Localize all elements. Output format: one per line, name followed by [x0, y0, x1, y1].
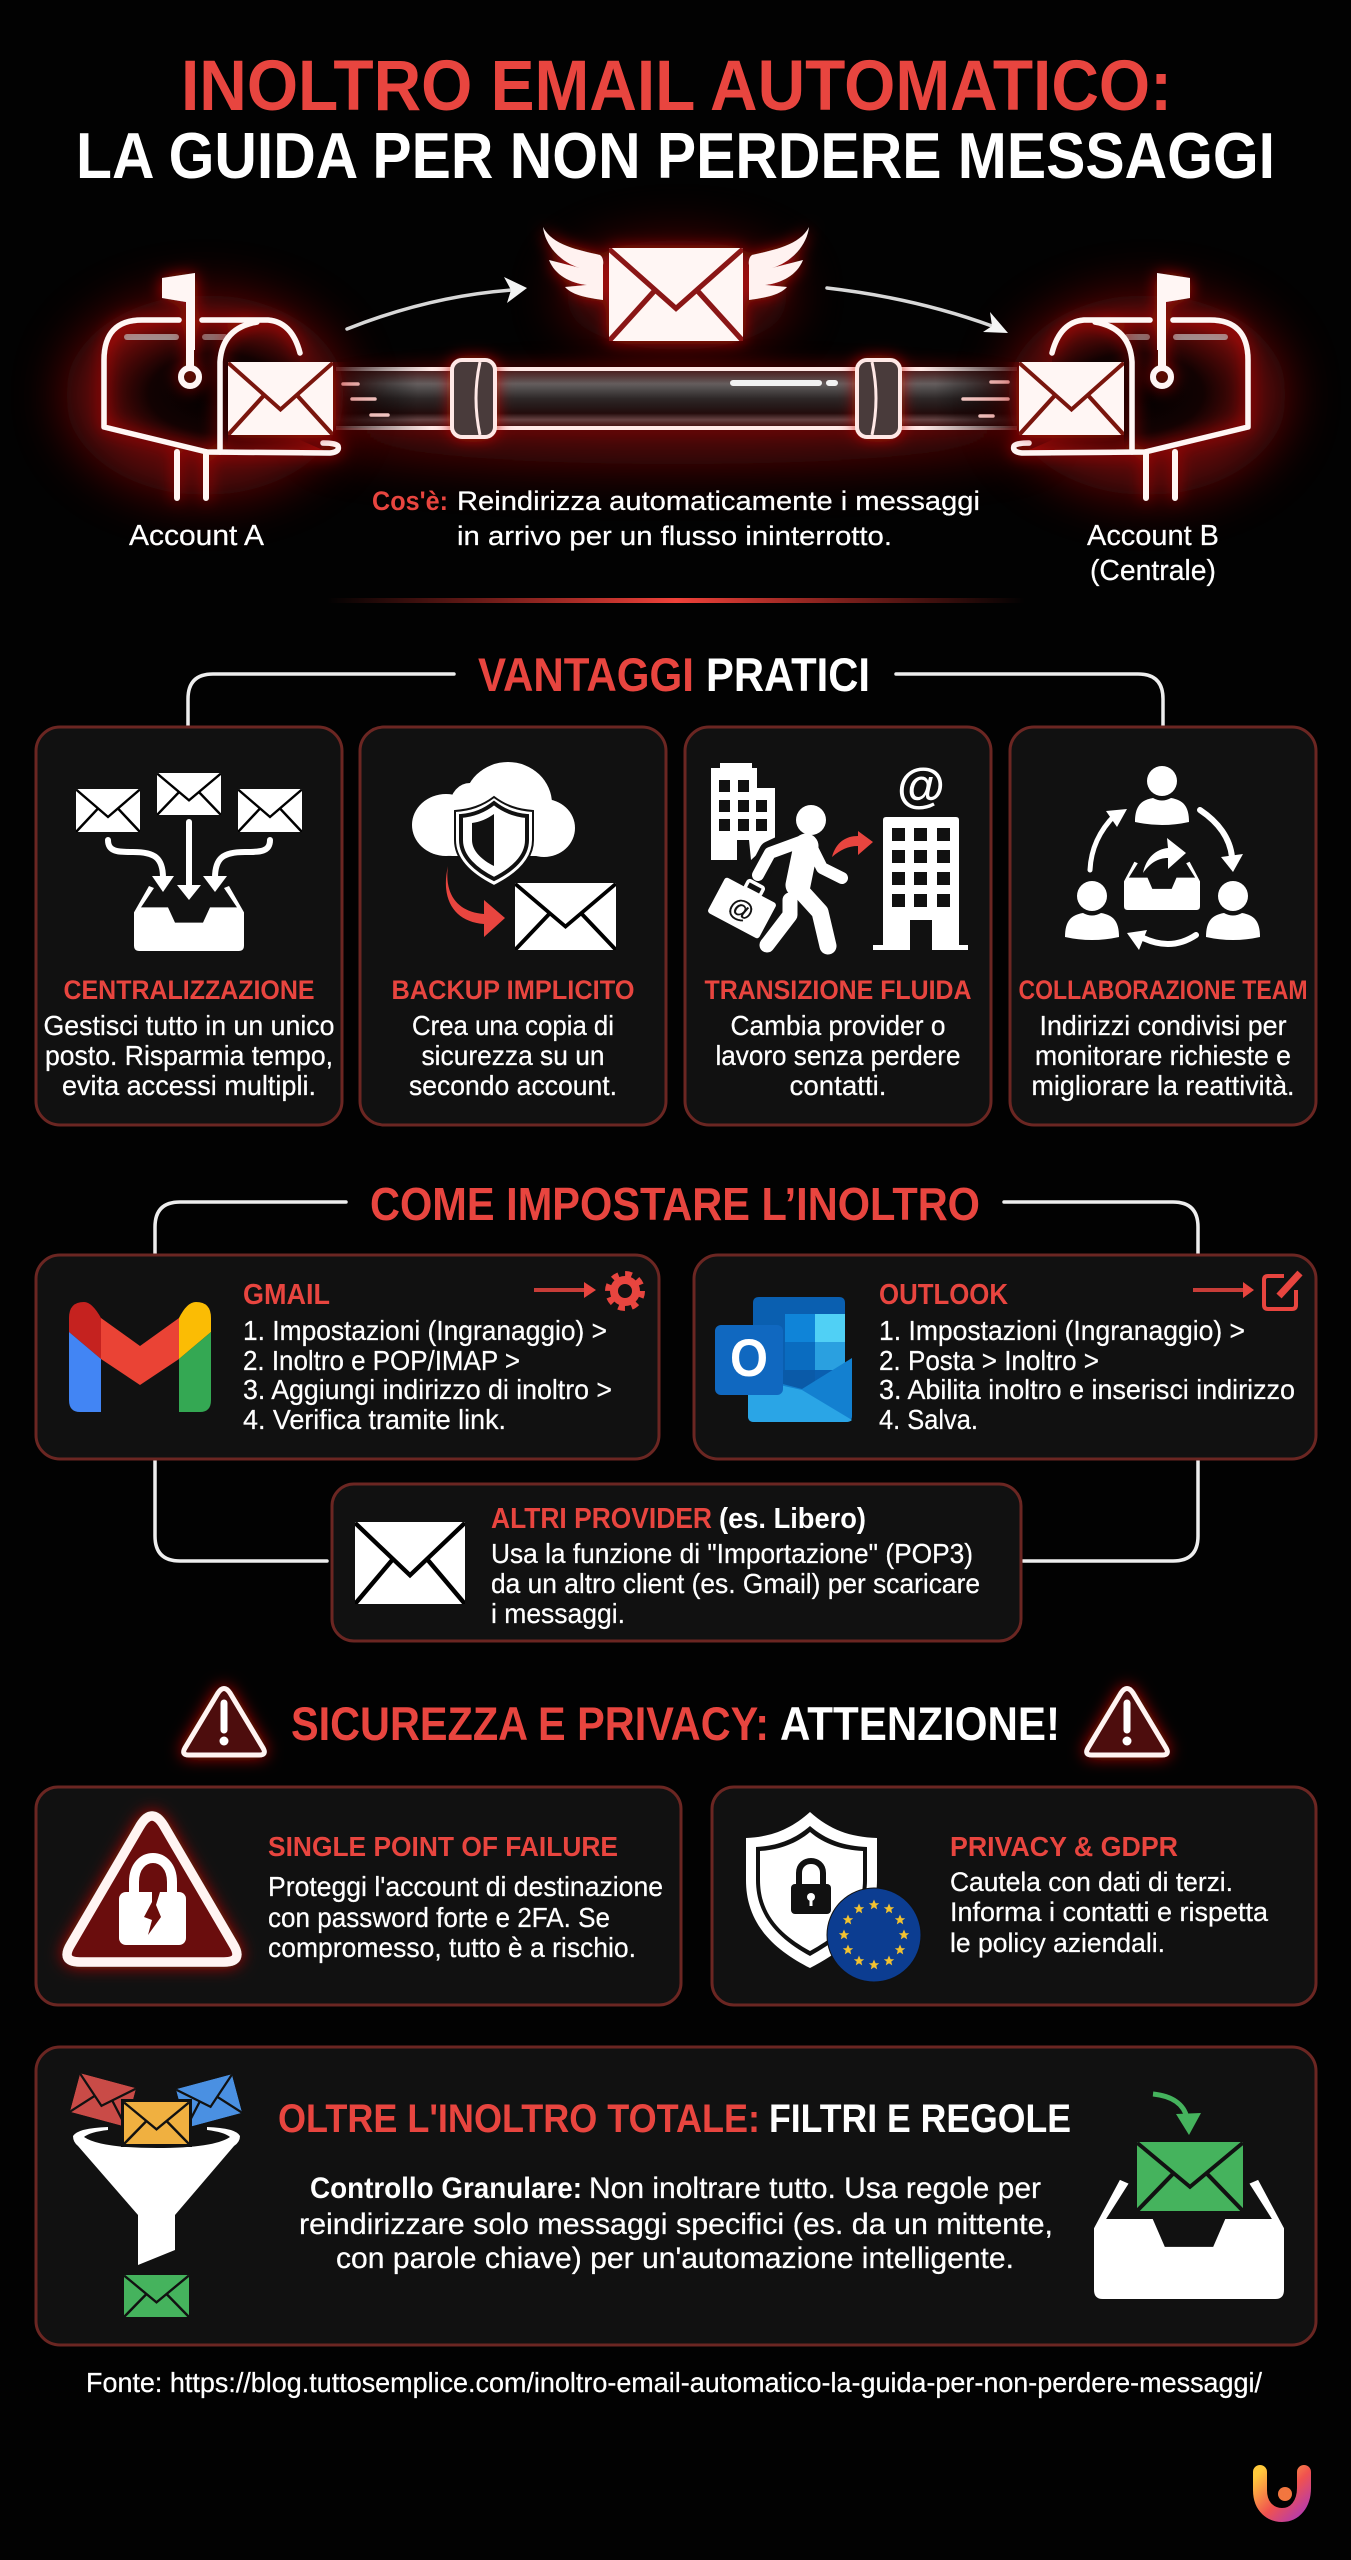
steps: 4. Verifica tramite link.: [243, 1404, 506, 1435]
icon: email funnel: [70, 2073, 242, 2317]
text: [299, 2172, 1053, 2275]
label: Account B: [1087, 520, 1219, 587]
heading: sicurezza e privacy: [184, 1688, 1167, 1755]
steps: 3. Aggiungi indirizzo di inoltro >: [243, 1374, 612, 1405]
icon: broken lock warning: [67, 1816, 237, 1962]
arrow: to mailbox: [827, 288, 1008, 333]
text: compromesso, tutto è a rischio.: [268, 1932, 636, 1963]
title: PRIVACY & GDPR: [950, 1831, 1178, 1862]
text: Non inoltrare tutto. Usa regole per: [589, 2172, 1041, 2205]
text: con parole chiave) per un'automazione intelligente.: [336, 2242, 1014, 2275]
icon: warning right: [1087, 1688, 1167, 1755]
text: Crea una copia di: [412, 1010, 614, 1041]
text: Informa i contatti e rispetta: [950, 1897, 1269, 1927]
definition text: [372, 486, 980, 551]
icon: person moving between offices: [707, 760, 968, 950]
heading: sicurezza e privacy: SICUREZZA E PRIVACY:: [291, 1697, 769, 1750]
title: [76, 47, 1275, 192]
text: migliorare la reattività.: [1032, 1070, 1294, 1101]
title: COLLABORAZIONE TEAM: [1018, 975, 1308, 1005]
title: (es. Libero): [719, 1503, 866, 1535]
text: Cambia provider o: [730, 1010, 946, 1041]
title: SINGLE POINT OF FAILURE: [268, 1831, 618, 1862]
title: [278, 2097, 1071, 2141]
text: [1032, 1010, 1294, 1101]
icon: green envelope into inbox: [1094, 2094, 1284, 2299]
text: le policy aziendali.: [950, 1928, 1165, 1958]
text: Proteggi l'account di destinazione: [268, 1871, 663, 1902]
icon: person moving between offices: @: [897, 760, 945, 813]
panel: outlook: [694, 1255, 1316, 1459]
text: evita accessi multipli.: [62, 1070, 316, 1101]
text: i messaggi.: [491, 1598, 625, 1629]
icon: outlook logo: O: [730, 1329, 768, 1388]
icon: arrow and gear: [534, 1274, 642, 1308]
panel: backup implicito: [360, 727, 666, 1125]
title: CENTRALIZZAZIONE: [64, 975, 314, 1005]
text: posto. Risparmia tempo,: [45, 1040, 333, 1071]
logo: [1260, 2472, 1304, 2515]
title: ALTRI PROVIDER: [491, 1503, 712, 1535]
panel: collaborazione team: [1010, 727, 1316, 1125]
panel: single point of failure: [36, 1787, 681, 2005]
heading: vantaggi pratici: VANTAGGI: [478, 648, 694, 701]
definition text: in arrivo per un flusso ininterrotto.: [457, 521, 892, 551]
heading: sicurezza e privacy: ATTENZIONE!: [780, 1697, 1060, 1750]
text: con password forte e 2FA. Se: [268, 1902, 610, 1933]
source: Fonte: https://blog.tuttosemplice.com/inoltro-email-automatico-la-guida-per-non-perdere-messaggi/: [86, 2367, 1262, 2398]
panel: filtri e regole: [36, 2047, 1316, 2345]
icon: envelopes into inbox: [76, 773, 302, 951]
heading: come impostare: COME IMPOSTARE L’INOLTRO: [370, 1178, 980, 1230]
text: [268, 1871, 663, 1963]
steps: 1. Impostazioni (Ingranaggio) >: [879, 1315, 1245, 1346]
text: Cautela con dati di terzi.: [950, 1867, 1233, 1897]
steps: [879, 1315, 1295, 1435]
text: [491, 1538, 980, 1629]
text: contatti.: [790, 1070, 886, 1101]
text: Gestisci tutto in un unico: [44, 1010, 334, 1041]
title: OLTRE L'INOLTRO TOTALE:: [278, 2097, 760, 2141]
icon: person moving between offices: @: [723, 891, 759, 928]
text: lavoro senza perdere: [716, 1040, 960, 1071]
panel: centralizzazione: [36, 727, 342, 1125]
icon: arrow and edit: [1193, 1273, 1300, 1309]
steps: 4. Salva.: [879, 1404, 978, 1435]
title: INOLTRO EMAIL AUTOMATICO:: [181, 47, 1172, 126]
panel: altri provider: [332, 1484, 1021, 1641]
label: Account B: (Centrale): [1090, 555, 1216, 587]
pipe: [336, 360, 1017, 437]
icon: cloud, shield and envelope: [412, 762, 616, 950]
panel: privacy and gdpr: [712, 1787, 1316, 2005]
heading: vantaggi pratici: PRATICI: [706, 648, 870, 701]
text: secondo account.: [409, 1070, 617, 1101]
panel: transizione fluida: [685, 727, 991, 1125]
text: [44, 1010, 334, 1101]
mailbox: Account A: [65, 273, 345, 498]
steps: 2. Inoltro e POP/IMAP >: [243, 1345, 520, 1376]
label: Account B: Account B: [1087, 520, 1219, 552]
mailbox: Account B: [1007, 273, 1287, 498]
icon: team sharing inbox: [1065, 766, 1260, 950]
icon: winged envelope: [543, 227, 809, 341]
title: [491, 1503, 866, 1535]
text: Controllo Granulare:: [310, 2172, 582, 2205]
title: FILTRI E REGOLE: [769, 2097, 1071, 2141]
title: TRANSIZIONE FLUIDA: [704, 975, 972, 1005]
hero: forwarding diagram: [65, 227, 1287, 498]
steps: 1. Impostazioni (Ingranaggio) >: [243, 1315, 607, 1346]
text: [409, 1010, 617, 1101]
text: sicurezza su un: [422, 1040, 604, 1071]
text: Indirizzi condivisi per: [1040, 1010, 1286, 1041]
panel: gmail: [36, 1255, 659, 1459]
steps: 3. Abilita inoltro e inserisci indirizzo: [879, 1374, 1295, 1405]
steps: [243, 1315, 612, 1435]
definition text: Cos'è:: [372, 486, 448, 516]
text: Usa la funzione di "Importazione" (POP3): [491, 1538, 973, 1569]
steps: 2. Posta > Inoltro >: [879, 1345, 1099, 1376]
heading: vantaggi pratici: [478, 648, 870, 701]
text: da un altro client (es. Gmail) per scaricare: [491, 1568, 980, 1599]
title: GMAIL: [243, 1279, 330, 1311]
icon: shield, lock and EU badge: [746, 1812, 921, 1982]
title: OUTLOOK: [879, 1279, 1008, 1311]
arrow: to envelope: [347, 277, 527, 329]
definition text: Reindirizza automaticamente i messaggi: [457, 486, 980, 516]
icon: envelope: [355, 1522, 465, 1604]
text: [716, 1010, 960, 1101]
text: monitorare richieste e: [1035, 1040, 1291, 1071]
text: [950, 1867, 1269, 1958]
label: Account A: Account A: [129, 520, 265, 552]
icon: outlook logo: [715, 1297, 852, 1422]
icon: warning left: [184, 1688, 264, 1755]
text: reindirizzare solo messaggi specifici (es. da un mittente,: [299, 2208, 1053, 2241]
title: BACKUP IMPLICITO: [392, 975, 634, 1005]
icon: gmail logo: [69, 1302, 211, 1412]
